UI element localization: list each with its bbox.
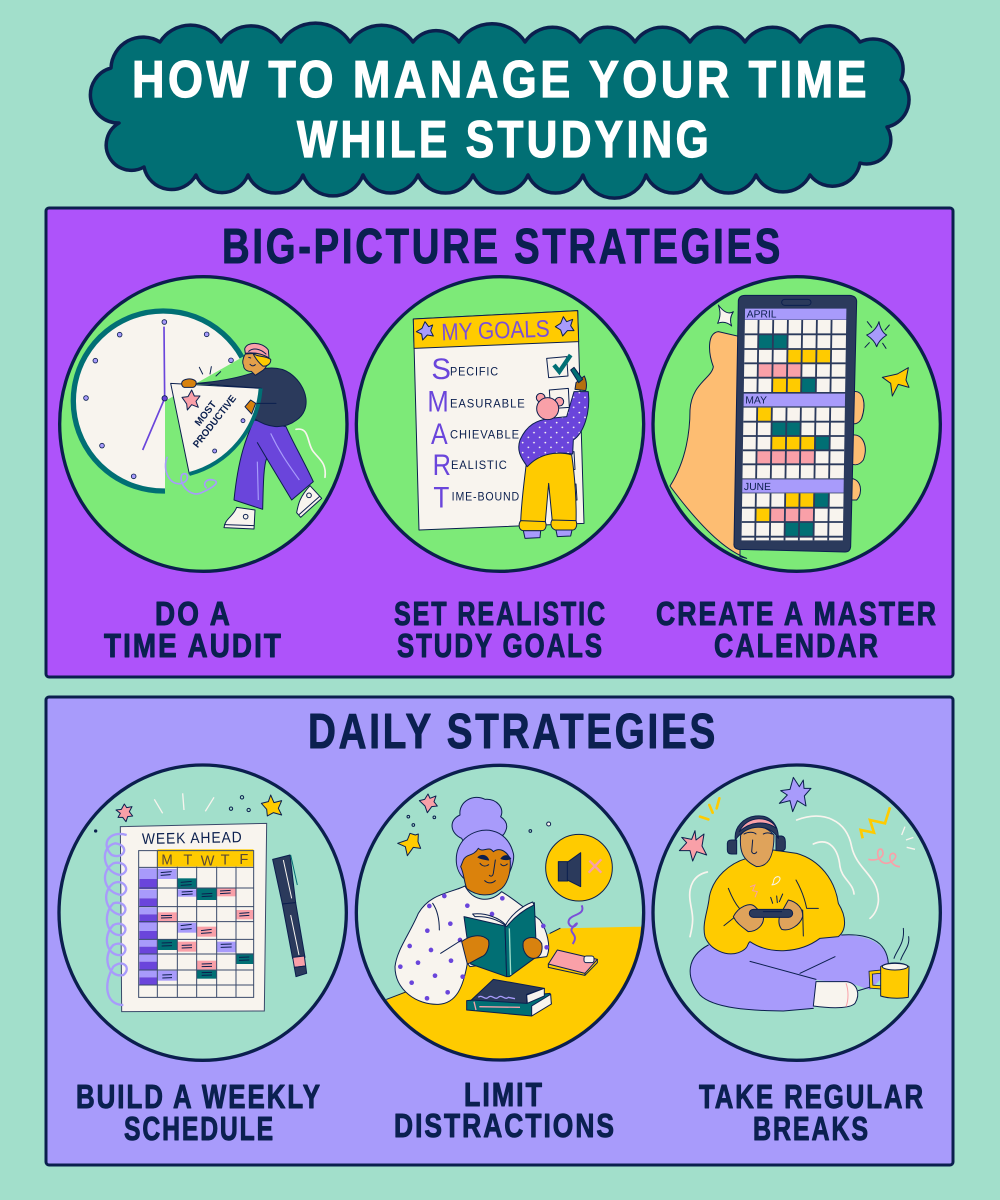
smart goals list: A — [431, 418, 448, 451]
label: limit distractions: DISTRACTIONS — [394, 1107, 616, 1144]
pie slice: most productive — [171, 383, 261, 474]
illustration: phone master calendar — [653, 277, 940, 571]
smart goals list: EASURABLE — [450, 396, 526, 410]
label: take regular breaks — [699, 1078, 925, 1147]
decorations — [398, 794, 582, 944]
title text: HOW TO MANAGE YOUR TIME — [132, 51, 870, 109]
schedule grid: F — [239, 852, 248, 868]
illustration: week ahead schedule: WEEK AHEAD — [142, 829, 243, 848]
schedule grid: T — [183, 853, 192, 869]
label: create a master calendar: CALENDAR — [714, 627, 880, 664]
smart goals list: R — [433, 449, 451, 482]
panel: daily strategies — [46, 697, 953, 1165]
pen — [273, 855, 307, 977]
illustration: my goals checklist — [356, 277, 644, 571]
label: set realistic study goals: STUDY GOALS — [397, 627, 604, 664]
title banner: WHILE STUDYING — [297, 111, 712, 169]
sparkles — [718, 305, 909, 396]
label: set realistic study goals: SET REALISTIC — [394, 595, 607, 632]
heading: daily strategies: DAILY STRATEGIES — [308, 705, 718, 759]
label: do a time audit: TIME AUDIT — [104, 627, 283, 664]
coffee mug — [871, 928, 909, 998]
mute icon — [546, 834, 612, 901]
person carrying slice — [197, 343, 322, 529]
person writing — [519, 367, 589, 538]
label: do a time audit — [104, 595, 283, 664]
illustration: take regular breaks — [653, 765, 940, 1060]
motion marks — [679, 777, 915, 937]
smart goals list: EALISTIC — [451, 458, 508, 472]
reading person — [395, 797, 549, 1004]
illustration: my goals checklist: MY GOALS — [441, 316, 550, 346]
pie slice: most productive: MOST — [193, 399, 219, 429]
label: limit distractions: LIMIT — [464, 1076, 544, 1113]
calendar grid: MAY — [745, 396, 767, 407]
illustration: clock time audit — [60, 277, 347, 571]
phone — [548, 950, 597, 975]
smart goals list: IME-BOUND — [452, 489, 520, 503]
smart goals list: CHIEVABLE — [450, 428, 520, 442]
calendar grid: APRIL — [747, 310, 777, 321]
schedule grid — [139, 849, 254, 997]
decorations — [94, 793, 282, 833]
schedule grid: T — [221, 853, 230, 869]
heading: big-picture strategies: BIG-PICTURE STRATEGIES — [222, 220, 783, 274]
smart goals list: M — [427, 386, 449, 419]
smart goals list: T — [433, 481, 449, 514]
calendar grid: JUNE — [744, 482, 771, 493]
label: create a master calendar: CREATE A MASTER — [656, 595, 938, 632]
calendar grid — [742, 309, 846, 540]
smart goals list: S — [431, 353, 451, 386]
illustration: week ahead schedule — [59, 765, 346, 1060]
label: build a weekly schedule: SCHEDULE — [124, 1110, 275, 1147]
smart goals list — [427, 353, 526, 514]
smart goals list: PECIFIC — [450, 364, 499, 378]
label: take regular breaks: BREAKS — [753, 1110, 870, 1147]
label: set realistic study goals — [394, 595, 607, 664]
label: take regular breaks: TAKE REGULAR — [699, 1078, 925, 1115]
illustration: reading limit distractions — [356, 765, 644, 1060]
label: limit distractions — [394, 1076, 616, 1144]
label: build a weekly schedule — [76, 1078, 322, 1147]
schedule grid: M — [161, 853, 173, 869]
schedule grid: W — [201, 853, 215, 869]
label: do a time audit: DO A — [155, 595, 232, 632]
gaming person — [690, 816, 888, 1011]
label: create a master calendar — [656, 595, 938, 664]
pie slice: most productive: PRODUCTIVE — [191, 393, 239, 450]
label: build a weekly schedule: BUILD A WEEKLY — [76, 1078, 322, 1115]
panel: big-picture strategies — [46, 208, 953, 677]
title banner — [90, 23, 909, 198]
books stack — [467, 979, 551, 1016]
